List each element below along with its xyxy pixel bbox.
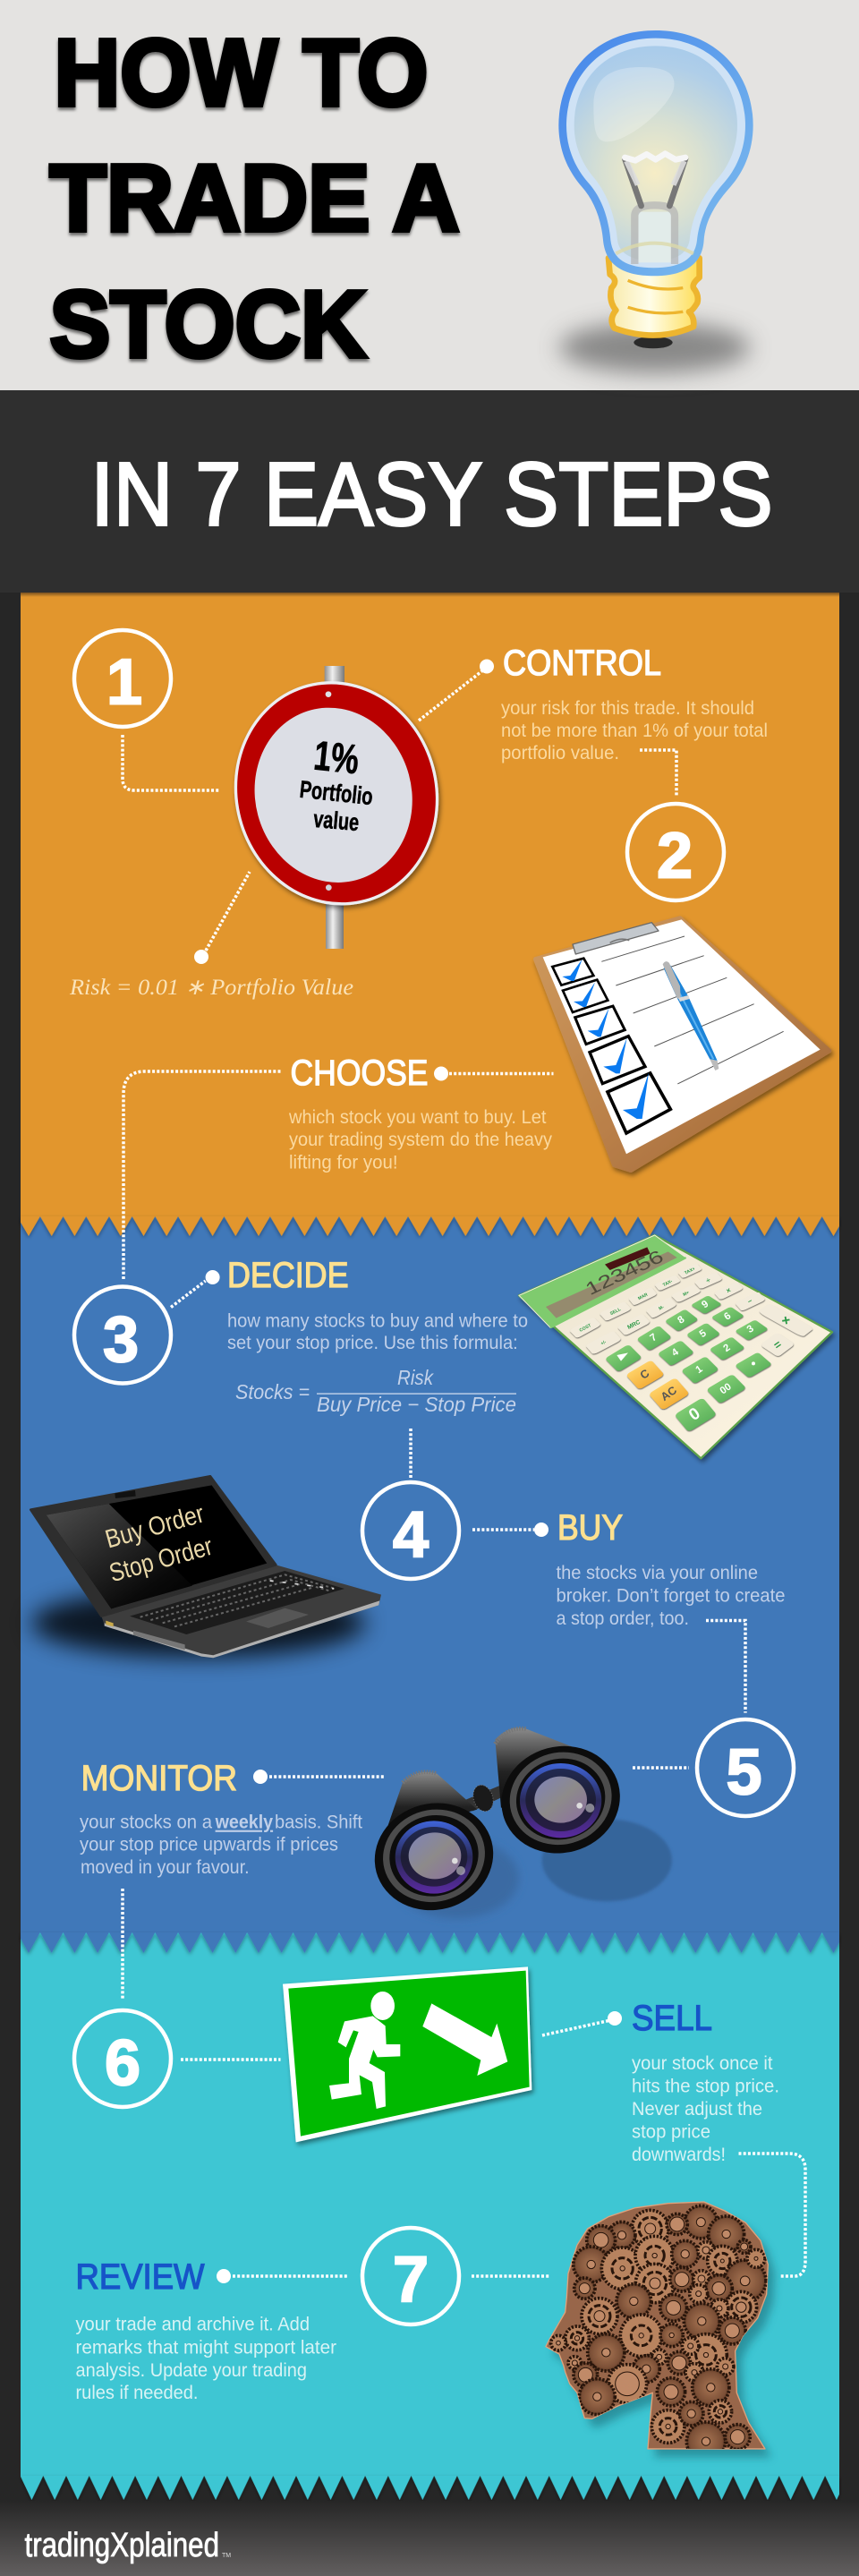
icon: calculator: 0 — [685, 1403, 703, 1424]
risk formula: Risk = 0.01 ∗ Portfolio Value — [69, 976, 353, 1000]
text: review: analysis. Update your trading — [75, 2359, 307, 2381]
icon: calculator: TAX- — [662, 1279, 674, 1288]
text: monitor: weekly — [215, 1812, 273, 1833]
text: decide: set your stop price. Use this formula: — [227, 1332, 518, 1353]
header panel — [0, 0, 859, 390]
icon: calculator: M+ — [682, 1290, 691, 1298]
text: choose: which stock you want to buy. Let — [288, 1106, 547, 1128]
icon: calculator: M- — [658, 1304, 666, 1312]
connector: binoculars to step 5 — [633, 1766, 689, 1770]
connector: choose to clipboard — [449, 1072, 553, 1075]
step 3 circle: 3 — [103, 1304, 139, 1376]
text: buy — [557, 1562, 786, 1629]
connector: control to step 2 — [640, 750, 676, 797]
icon: risk sign — [209, 658, 464, 949]
text: buy: broker. Don’t forget to create — [557, 1585, 786, 1607]
text: monitor: your stop price upwards if prices — [80, 1834, 338, 1855]
text: buy: the stocks via your online — [557, 1562, 758, 1583]
step 6 circle — [74, 2010, 171, 2107]
icon: calculator: 7 — [648, 1332, 659, 1343]
icon: calculator: 6 — [722, 1310, 733, 1323]
text: control: portfolio value. — [501, 742, 619, 763]
text: sell: stop price — [632, 2121, 710, 2143]
icon: calculator — [519, 1235, 832, 1458]
icon: calculator: 8 — [676, 1314, 686, 1326]
text: review: rules if needed. — [75, 2382, 199, 2403]
connector dot: buy — [534, 1523, 549, 1537]
icon: risk sign: value — [312, 806, 360, 836]
icon: calculator: TAX+ — [684, 1267, 696, 1276]
icon: calculator: 4 — [670, 1346, 681, 1359]
title: STOCK — [50, 272, 367, 378]
connector dot: risk formula — [194, 950, 208, 964]
connector: step 1 to sign — [123, 735, 219, 790]
text: monitor: moved in your favour. — [81, 1856, 250, 1878]
icon: calculator: 3 — [745, 1323, 756, 1335]
connector dot: sell — [608, 2011, 622, 2026]
icon: risk sign: 1% — [311, 732, 361, 782]
step 7 circle: 7 — [393, 2244, 429, 2316]
connector: sell to head — [739, 2154, 805, 2276]
icon: laptop: Buy Order — [102, 1499, 208, 1555]
step 2 circle: 2 — [657, 820, 693, 891]
icon: calculator: ÷ — [705, 1275, 712, 1285]
connector dot: monitor — [253, 1770, 268, 1784]
connector dot: control — [480, 659, 494, 673]
stocks formula: Buy Price − Stop Price — [317, 1393, 516, 1416]
step 4 circle: 4 — [393, 1499, 429, 1571]
text: control: not be more than 1% of your total — [501, 720, 768, 741]
connector: buy to step 5 — [706, 1620, 745, 1713]
text: choose: lifting for you! — [289, 1151, 397, 1173]
icon: calculator: MRC — [626, 1319, 642, 1331]
heading: choose: CHOOSE — [290, 1053, 428, 1093]
text: decide: how many stocks to buy and where to — [227, 1310, 528, 1332]
connector: step 6 to exit sign — [181, 2058, 281, 2061]
text: sell: Never adjust the — [632, 2098, 762, 2120]
icon: calculator: 9 — [700, 1299, 710, 1310]
icon: calculator: − — [746, 1297, 754, 1306]
icon: calculator: 1 — [693, 1364, 704, 1376]
icon: calculator: + — [780, 1311, 792, 1329]
icon: calculator: C — [638, 1367, 651, 1382]
step 1 circle — [74, 630, 171, 727]
icon: exit sign — [283, 1966, 532, 2142]
text: control — [501, 697, 768, 763]
icon: calculator: +/- — [600, 1339, 608, 1347]
orange zigzag edge — [21, 1216, 839, 1236]
icon: calculator: 2 — [721, 1343, 732, 1354]
step 5 circle: 5 — [726, 1736, 762, 1808]
stocks formula: Risk — [397, 1366, 434, 1389]
icon: binoculars — [362, 1728, 672, 1923]
text: monitor — [80, 1812, 362, 1878]
connector: sign to formula — [206, 872, 250, 951]
stocks formula — [235, 1366, 516, 1416]
teal zigzag edge — [21, 2476, 839, 2500]
connector: monitor to step 6 — [121, 1889, 124, 1999]
icon: laptop — [30, 1476, 381, 1658]
connector: step 4 to buy — [472, 1528, 534, 1531]
connector: choose to step 3 — [123, 1071, 281, 1281]
heading: control: CONTROL — [503, 644, 661, 683]
icon: calculator: 123456 — [582, 1246, 668, 1299]
icon: gear head — [546, 2202, 775, 2461]
blue zigzag edge — [21, 1932, 839, 1953]
step 3 circle — [74, 1287, 171, 1384]
title — [50, 20, 460, 378]
icon: calculator: = — [771, 1338, 784, 1352]
heading: buy: BUY — [557, 1508, 623, 1548]
step 4 circle — [362, 1482, 459, 1579]
footer logo: TM — [222, 2553, 231, 2559]
text: sell: hits the stop price. — [632, 2076, 779, 2097]
panel: orange section — [21, 593, 839, 1216]
text: choose: your trading system do the heavy — [289, 1129, 552, 1150]
heading: decide: DECIDE — [227, 1256, 349, 1295]
connector dot: choose — [434, 1067, 448, 1081]
text: review: your trade and archive it. Add — [75, 2313, 310, 2334]
icon: risk sign: Portfolio — [298, 776, 374, 810]
footer logo: tradingXplained — [25, 2527, 219, 2564]
step 2 circle — [627, 804, 724, 900]
heading: review: REVIEW — [75, 2257, 205, 2297]
icon: calculator: MAR — [637, 1292, 649, 1301]
step 6 circle: 6 — [105, 2028, 140, 2100]
connector: step 7 to head — [472, 2274, 549, 2278]
text: buy: a stop order, too. — [557, 1608, 689, 1629]
icon: calculator: COST — [579, 1323, 592, 1334]
connector: monitor to binoculars — [269, 1775, 385, 1778]
icon: laptop: Stop Order — [106, 1532, 216, 1588]
panel: blue section — [21, 1216, 839, 1953]
icon: clipboard — [536, 918, 829, 1170]
title: TRADE A — [50, 145, 460, 251]
subtitle band — [0, 390, 859, 593]
icon: calculator: 5 — [698, 1328, 709, 1340]
text: monitor: your stocks on a — [80, 1812, 212, 1833]
icon: calculator: × — [725, 1286, 733, 1295]
text: review: remarks that might support later — [75, 2336, 336, 2358]
heading: monitor: MONITOR — [81, 1759, 237, 1798]
text: sell: your stock once it — [632, 2052, 773, 2074]
heading: sell: SELL — [632, 1999, 712, 2038]
text: control: your risk for this trade. It should — [501, 697, 754, 719]
subtitle: IN 7 EASY STEPS — [91, 444, 773, 544]
icon: calculator: AC — [659, 1384, 679, 1403]
icon: calculator: SELL — [609, 1307, 622, 1317]
connector: step 3 to decide — [171, 1281, 206, 1307]
text: choose — [288, 1106, 552, 1173]
footer band — [0, 2501, 859, 2576]
text: review — [75, 2313, 336, 2403]
title: HOW TO — [54, 20, 428, 125]
orange top shadow — [21, 593, 839, 597]
step 5 circle — [697, 1719, 794, 1816]
stocks formula: Stocks = — [235, 1380, 310, 1403]
step 7 circle — [362, 2228, 459, 2324]
text: sell — [632, 2052, 779, 2165]
icon: calculator: 00 — [719, 1381, 734, 1396]
text: decide — [227, 1310, 528, 1353]
connector: review to step 7 — [233, 2274, 349, 2278]
connector dot: decide — [206, 1270, 220, 1284]
connector dot: review — [217, 2269, 231, 2283]
connector: exit sign to sell — [542, 2021, 608, 2035]
text: monitor: basis. Shift — [275, 1812, 362, 1833]
icon: light bulb — [558, 30, 753, 373]
panel: teal section — [21, 1932, 839, 2476]
step 1 circle: 1 — [106, 646, 142, 718]
text: sell: downwards! — [632, 2144, 726, 2165]
connector: formula to step 4 — [409, 1429, 412, 1478]
connector: sign to control — [419, 671, 482, 721]
